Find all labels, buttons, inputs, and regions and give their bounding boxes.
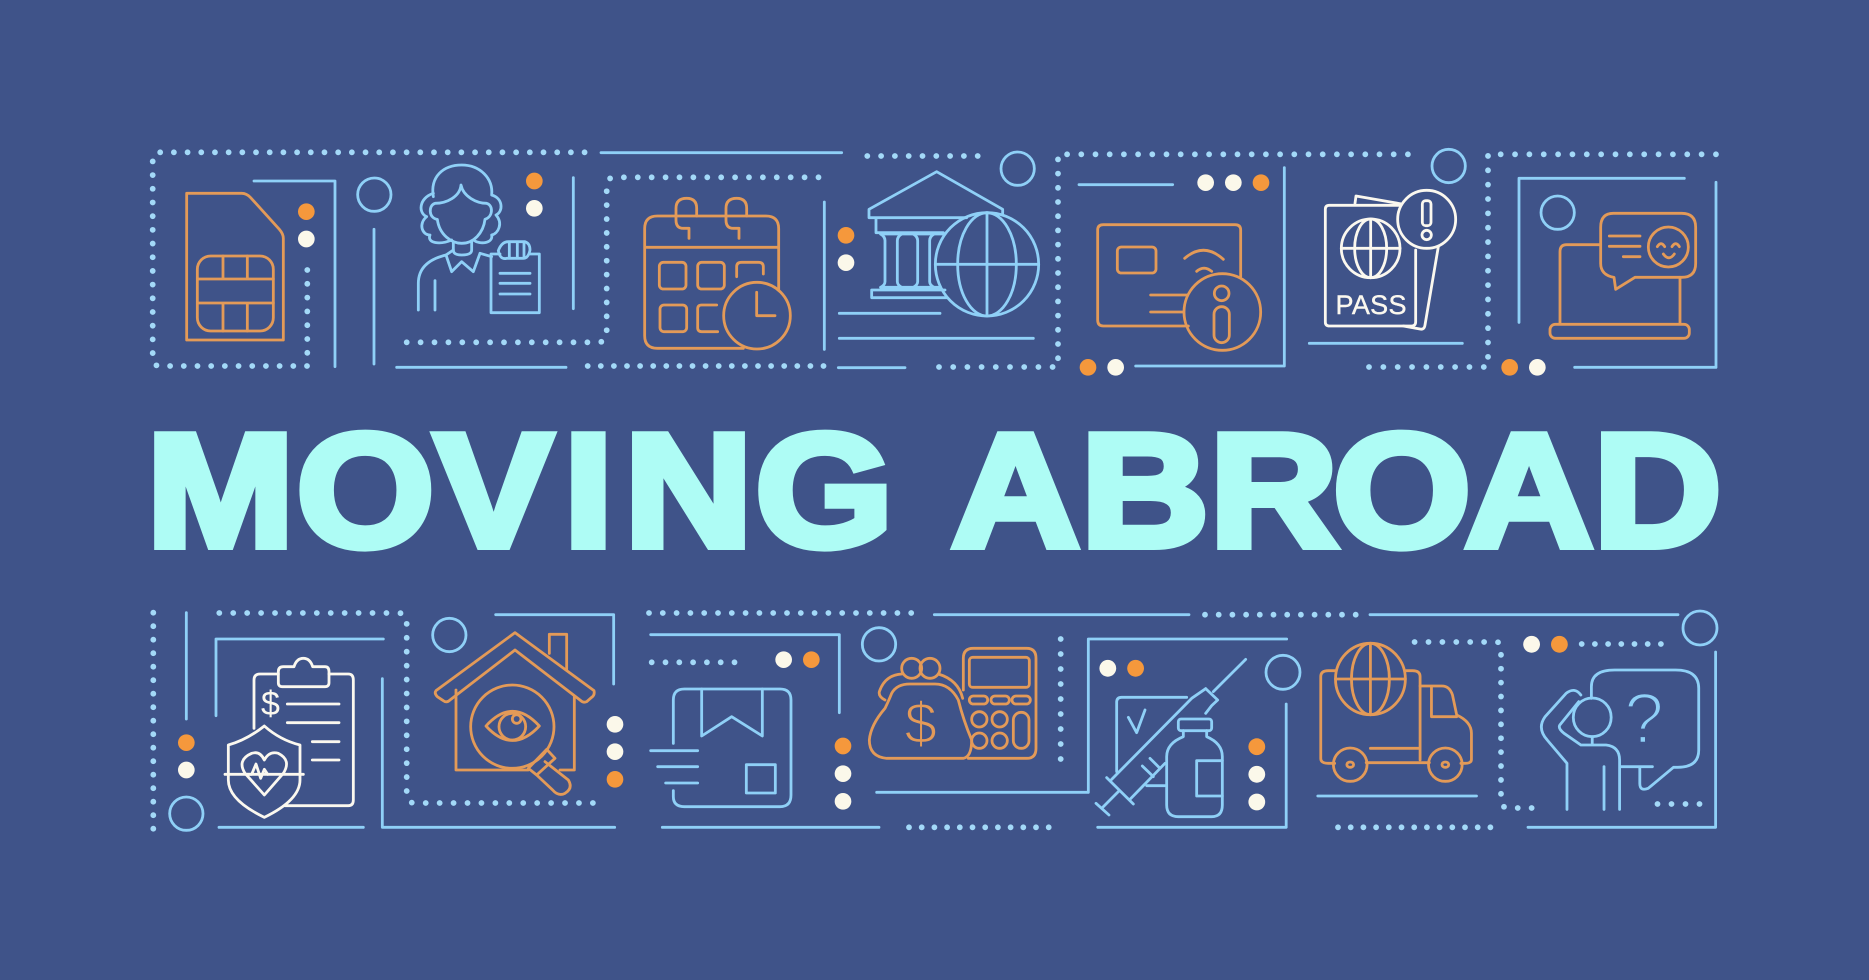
icon: confused person with question bubble <box>1541 670 1699 809</box>
icon: laptop with chat bubble <box>1550 213 1696 338</box>
dollar sign on purse: $ <box>905 691 937 756</box>
question mark: ? <box>1624 680 1664 759</box>
icon: bank with globe <box>869 172 1039 316</box>
panel: top icon row <box>153 149 1716 376</box>
icon: vaccine syringe and vial <box>1096 659 1246 817</box>
icon: purse and calculator <box>869 648 1036 758</box>
icon: delivery box <box>651 689 791 807</box>
icon: sim card <box>187 193 283 340</box>
panel: bottom icon row <box>153 611 1717 830</box>
title: MOVING ABROAD <box>147 400 1721 580</box>
icon: delivery truck with globe <box>1321 643 1471 781</box>
icon: calendar with clock <box>645 198 790 349</box>
icon: house inspection with magnifier <box>435 633 594 794</box>
passport label: PASS <box>1336 290 1406 320</box>
icon: woman with document <box>418 165 539 313</box>
icon: passport with alert <box>1325 190 1456 329</box>
icon: medical insurance clipboard with shield <box>225 658 353 817</box>
dollar sign on clipboard: $ <box>261 685 280 723</box>
icon: bank card with info <box>1098 225 1261 350</box>
